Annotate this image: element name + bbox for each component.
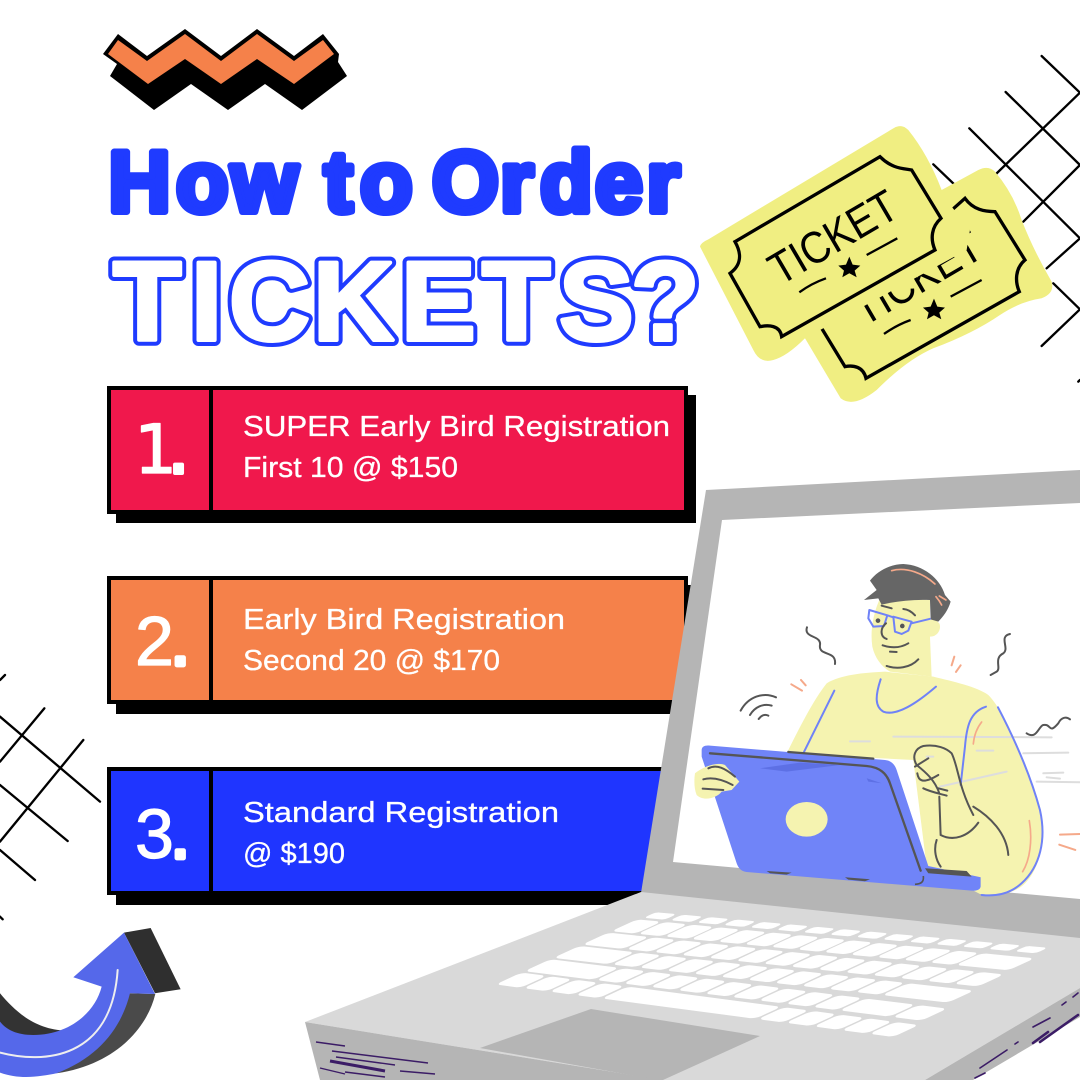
decorative zigzag icon [103,29,347,110]
panel: step 3: @ $190 [243,838,345,870]
laptop screen display [673,503,1080,899]
title: TICKETS? outlined: TICKETS? [113,239,699,364]
man laptop [702,746,981,891]
laptop logo [786,802,828,837]
laptop right side face [925,988,1080,1080]
hair highlights [892,569,946,605]
icon: tickets: TICKET [759,180,906,295]
panel: step 3: . [170,795,190,873]
laptop illustration [305,470,1080,1080]
laptop edge lines [710,752,921,871]
title: How to Order: How to Order [108,134,680,230]
grid pattern: left [0,675,100,919]
laptop touchpad [480,1009,760,1080]
man head [872,598,940,677]
panel: step 1 [109,388,696,523]
man left hand [694,764,739,799]
grid pattern: top right [933,56,1080,382]
man shirt lines [804,679,1042,895]
panel: step 1: First 10 @ $150 [243,452,458,484]
panel: step 1: SUPER Early Bird Registration [243,411,670,443]
panel: step 2: Early Bird Registration [243,604,565,636]
panel: step 2 [109,578,696,714]
laptop base top [305,892,1080,1080]
laptop screen frame [641,470,1080,940]
laptop keyboard [495,912,1048,1037]
illustration: man with laptop [694,564,1080,895]
panel: step 3: Standard Registration [243,797,559,829]
panel: step 2: . [170,602,190,680]
man arm accents [973,722,1031,872]
man body [787,672,1042,895]
icon: curved arrow [0,928,181,1077]
panel: step 2: 2 [135,602,174,680]
laptop left side face [305,1022,663,1080]
salmon sparks [791,657,1080,850]
panel: step 3 [109,769,696,905]
panel: step 1: . [168,411,189,490]
background smudges [850,737,1080,787]
panel: step 2: Second 20 @ $170 [243,645,500,677]
man glasses [868,610,931,634]
icon: tickets [700,126,1052,402]
man face lines [876,606,918,668]
panel: step 1: 1 [134,411,177,490]
title: TICKETS? outlined: TICKETS? [113,239,699,364]
panel: step 3: 3 [135,795,174,873]
motion squiggles [741,627,1070,735]
man hair [864,564,951,622]
man right fist and arm lines [914,745,1008,867]
icon: tickets: TICKET [844,220,991,335]
